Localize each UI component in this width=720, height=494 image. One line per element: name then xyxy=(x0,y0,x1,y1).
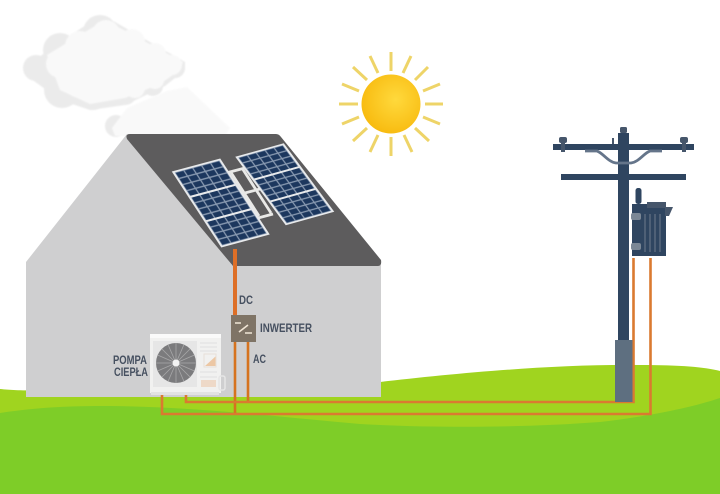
label: DC: DC xyxy=(239,293,253,307)
fan xyxy=(156,343,196,383)
upper crossarm xyxy=(553,144,694,150)
label: POMPA CIEPŁA: POMPA xyxy=(113,353,147,367)
label: POMPA CIEPŁA: CIEPŁA xyxy=(114,365,148,379)
sun xyxy=(339,52,443,156)
solar panel: right xyxy=(235,143,334,225)
cloud: behind roof xyxy=(105,87,230,137)
pole base sleeve xyxy=(615,340,632,402)
label: INWERTER: INWERTER xyxy=(260,321,312,335)
inverter xyxy=(231,315,256,342)
roof xyxy=(126,134,381,266)
top insulator xyxy=(620,127,627,133)
background hills xyxy=(0,365,720,494)
solar panels xyxy=(172,143,334,248)
lower crossarm xyxy=(561,174,686,180)
label: AC: AC xyxy=(253,352,266,366)
panel mounting frame xyxy=(226,168,273,218)
solar panel: left xyxy=(172,158,270,248)
insulators xyxy=(559,137,688,152)
label: POMPA CIEPŁA xyxy=(113,353,148,379)
orange wiring xyxy=(162,249,650,414)
utility pole xyxy=(553,127,694,402)
arm braces xyxy=(585,151,662,163)
heat pump unit xyxy=(150,334,225,395)
cloud: large xyxy=(23,15,185,110)
pole shaft xyxy=(618,133,629,340)
transformer xyxy=(631,188,673,256)
house wall xyxy=(26,134,381,397)
vent and label plate xyxy=(200,343,217,387)
